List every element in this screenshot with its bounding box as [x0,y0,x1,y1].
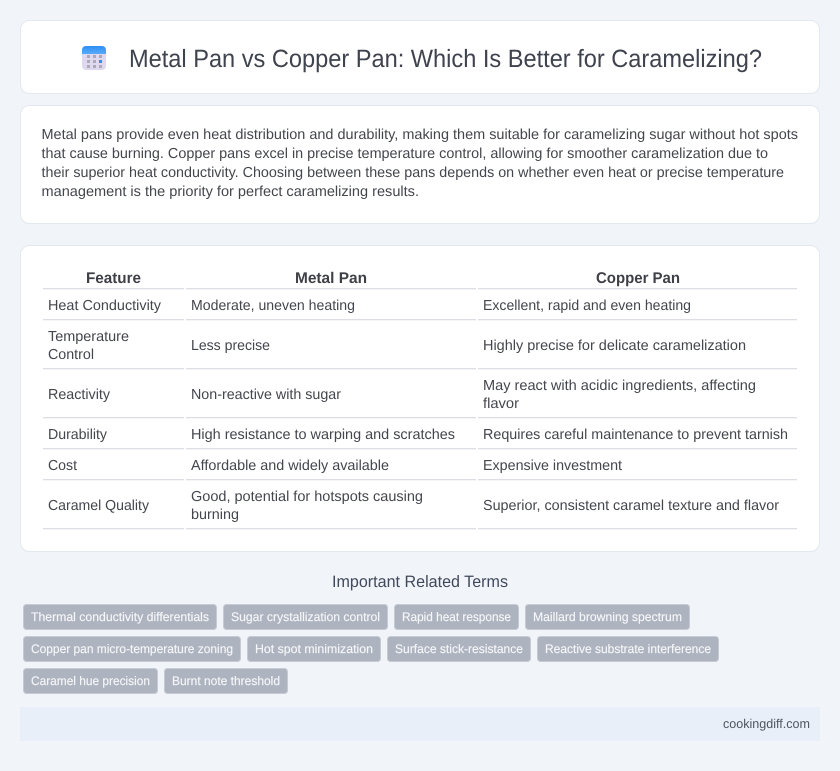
row: temperature control [48,329,746,363]
row: durability [48,427,788,443]
related term tags: Hot spot minimization [255,642,373,656]
row: heat conductivity: Moderate, uneven heating [191,298,355,314]
row: durability: Requires careful maintenance to prevent tarnish [483,427,788,443]
intro text: that cause burning. Copper pans excel in precise temperature control, allowing for smoother caramelization due to [42,146,768,162]
row: heat conductivity [48,298,691,314]
table header: Feature [86,270,141,287]
row: cost: Affordable and widely available [191,458,389,474]
row: cost [48,458,622,474]
related term tags [24,604,718,694]
row: temperature control: Temperature [48,329,129,345]
row: heat conductivity: Excellent, rapid and even heating [483,298,691,314]
row: caramel quality [48,489,779,523]
row: cost: Expensive investment [483,458,622,474]
row: temperature control: Control [48,347,94,363]
table header [86,270,680,287]
comparison table panel [20,246,820,552]
row: caramel quality: burning [191,507,239,523]
intro text [42,127,798,200]
table header: Copper Pan [596,270,680,287]
footer: cookingdiff.com [723,716,810,731]
intro text: management is the priority for perfect caramelizing results. [42,184,419,200]
related term tags: Copper pan micro-temperature zoning [31,642,233,656]
related term tags: Reactive substrate interference [545,642,711,656]
row: reactivity: Non-reactive with sugar [191,387,341,403]
related term tags: Sugar crystallization control [231,610,380,624]
related term tags: Surface stick-resistance [395,642,523,656]
row: caramel quality: Caramel Quality [48,498,150,514]
row: durability: High resistance to warping and scratches [191,427,455,443]
row: caramel quality: Good, potential for hotspots causing [191,489,423,505]
title: Metal Pan vs Copper Pan: Which Is Better for Caramelizing? [129,45,762,73]
heading: related terms: Important Related Terms [332,573,508,591]
related term tags: Burnt note threshold [172,674,280,688]
intro panel [20,106,820,224]
icon: calendar [82,46,106,70]
row: reactivity: flavor [483,396,519,412]
row: reactivity: May react with acidic ingredients, affecting [483,378,756,394]
header panel [20,20,820,94]
related term tags: Thermal conductivity differentials [31,610,209,624]
footer [20,707,820,741]
intro text: Metal pans provide even heat distribution and durability, making them suitable for caramelizing sugar without hot spots [42,127,798,143]
related term tags: Rapid heat response [402,610,511,624]
intro text: their superior heat conductivity. Choosing between these pans depends on whether even heat or precise temperature [42,165,784,181]
row: cost: Cost [48,458,77,474]
related term tags: Maillard browning spectrum [533,610,682,624]
row: temperature control: Less precise [191,338,270,354]
related term tags: Caramel hue precision [31,674,150,688]
row: reactivity: Reactivity [48,387,111,403]
table header: Metal Pan [295,270,367,287]
row: caramel quality: Superior, consistent caramel texture and flavor [483,498,779,514]
row: heat conductivity: Heat Conductivity [48,298,162,314]
row: reactivity [48,378,756,412]
row: durability: Durability [48,427,108,443]
row: temperature control: Highly precise for delicate caramelization [483,338,746,354]
